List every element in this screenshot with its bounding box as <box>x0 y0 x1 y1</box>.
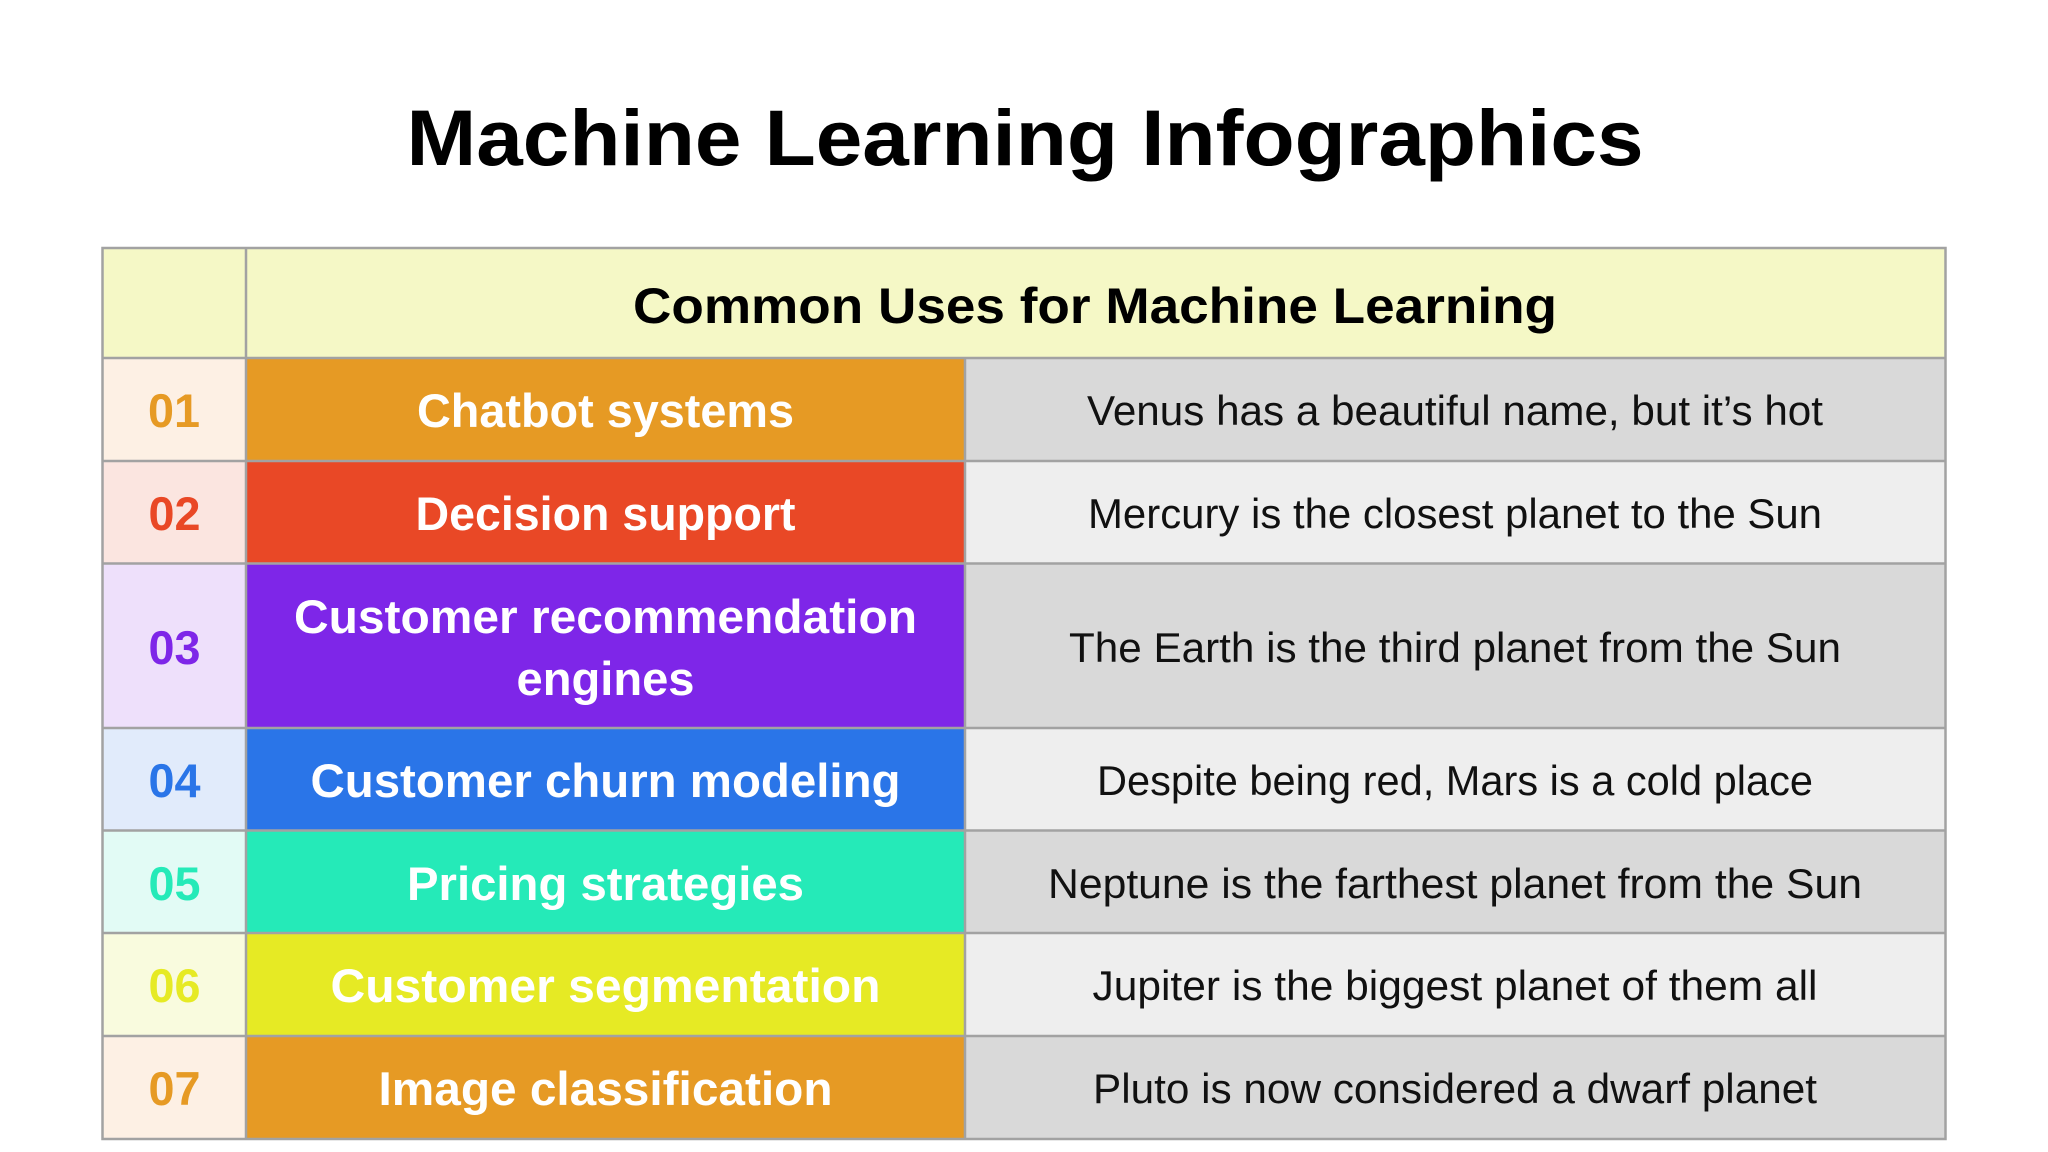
row 05: Neptune is the farthest planet from the Sun <box>1048 860 1862 907</box>
row 05: Pricing strategies <box>407 857 804 910</box>
row 04: 04 <box>148 754 200 807</box>
row 03: engines <box>516 652 694 705</box>
row 02: 02 <box>148 487 200 540</box>
row 06: Jupiter is the biggest planet of them all <box>1092 962 1818 1009</box>
row 01: Venus has a beautiful name, but it’s hot <box>1087 387 1823 434</box>
row 04: Despite being red, Mars is a cold place <box>1097 757 1813 804</box>
row 03: The Earth is the third planet from the Sun <box>1069 624 1841 671</box>
row 01: Chatbot systems <box>417 384 794 437</box>
table <box>102 248 1946 1139</box>
table header row <box>103 248 1946 358</box>
row 01 <box>103 358 1946 461</box>
row 05: 05 <box>148 857 200 910</box>
row 06 <box>103 933 1946 1036</box>
row 03 <box>103 564 1946 728</box>
row 06: 06 <box>148 959 200 1012</box>
row 04 <box>103 728 1946 831</box>
row 02: Decision support <box>416 487 796 540</box>
row 05 <box>103 831 1946 933</box>
row 07: Image classification <box>378 1062 832 1115</box>
row 03: Customer recommendation <box>294 590 917 643</box>
row 02 <box>103 461 1946 564</box>
row 07 <box>103 1036 1946 1139</box>
table heading: Common Uses for Machine Learning <box>633 278 1557 334</box>
row 01: 01 <box>148 384 200 437</box>
title: Machine Learning Infographics <box>406 93 1644 182</box>
row 02: Mercury is the closest planet to the Sun <box>1088 490 1822 537</box>
row 07: Pluto is now considered a dwarf planet <box>1093 1065 1817 1112</box>
row 07: 07 <box>148 1062 200 1115</box>
row 06: Customer segmentation <box>330 959 880 1012</box>
row 04: Customer churn modeling <box>310 754 900 807</box>
row 03: 03 <box>148 621 200 674</box>
